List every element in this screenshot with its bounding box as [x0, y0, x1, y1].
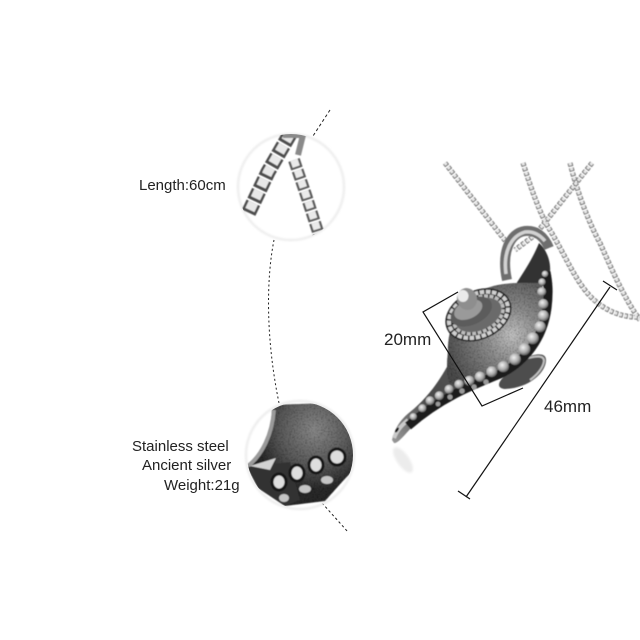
lower bead band: [408, 272, 548, 426]
label: material and weight: Stainless steel: [132, 438, 229, 455]
reflection under spout: [389, 444, 417, 476]
lamp body: [447, 283, 548, 385]
label: material and weight: Weight:21g: [164, 477, 240, 494]
dashed connector: top: [313, 110, 330, 136]
lid knob: [454, 286, 480, 312]
lamp spout: [392, 365, 470, 443]
necklace chains: [445, 163, 640, 320]
lamp pendant: [389, 231, 550, 476]
dashed connector: bottom: [322, 503, 348, 532]
infographic canvas: [132, 110, 640, 532]
beads: [410, 271, 549, 420]
label: material and weight: [132, 438, 240, 494]
dimension: 20mm bracket: [423, 292, 523, 406]
dashed connector: middle curve: [269, 240, 279, 403]
detail circle: lamp surface close-up: [246, 401, 356, 509]
detail circle: chain close-up: [238, 134, 344, 240]
label: length: Length:60cm: [139, 177, 226, 194]
bail inner surface: [516, 243, 550, 290]
dimension label: 20mm: 20mm: [384, 330, 431, 349]
dimension label: 46mm: 46mm: [544, 397, 591, 416]
bail loop: [505, 231, 549, 280]
dimension: 46mm line: [458, 281, 617, 499]
lower small beads: [436, 379, 489, 406]
lamp foot: [499, 354, 546, 389]
label: material and weight: Ancient silver: [142, 457, 231, 474]
lid with grid: [438, 280, 519, 350]
